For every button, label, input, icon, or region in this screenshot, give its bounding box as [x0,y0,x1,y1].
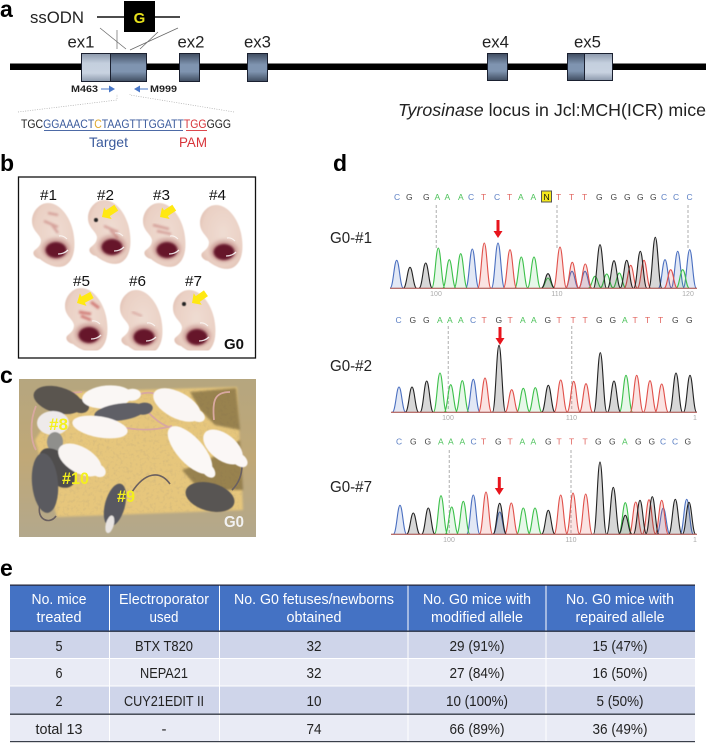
table row: BTX T820: 15 (47%) [592,638,648,655]
table row: CUY21EDIT II [56,693,644,710]
base calls: A [622,436,628,446]
table row: total [36,721,648,738]
table header text: treated [36,609,82,626]
base calls: C [660,436,666,446]
PAM label: PAM [179,134,207,150]
fetus #6 [120,290,162,354]
base calls: C [470,315,476,325]
base calls: G [609,436,616,446]
base calls: C [686,192,693,202]
mouse labels [49,416,135,506]
panel label c: c [0,362,13,388]
base calls: G [423,192,430,202]
traces [390,237,697,288]
table row: NEPA21 [56,665,648,682]
base calls: A [622,315,628,325]
table grid lines [10,584,695,742]
base calls: G [635,436,642,446]
table row: NEPA21: 6 [56,665,62,682]
exon 3 [248,54,268,82]
base calls: T [556,436,562,446]
position ticks: 110 [565,537,577,544]
fetus labels: #4 [209,187,226,204]
table row: NEPA21: 27 (84%) [450,665,504,682]
exon 5 [568,54,612,80]
table row: total: 74 [306,721,322,738]
primers M463 and M999 [71,84,177,94]
panel a: tyrosinase locus diagram [0,0,706,150]
base calls: C [470,436,477,446]
panel e: results table [0,555,695,742]
table row: CUY21EDIT II: 2 [56,693,62,710]
position ticks: 100 [442,415,454,422]
ssODN donor with G base: G [134,10,145,27]
base calls: A [531,315,537,325]
table row: BTX T820: 32 [306,638,322,655]
base calls: A [530,436,536,446]
N highlight [542,191,552,202]
table row: CUY21EDIT II: 10 [306,693,322,710]
exon 2 [180,54,200,82]
base calls: G [495,436,502,446]
base calls: G [610,192,617,202]
table row: CUY21EDIT II: CUY21EDIT II [124,693,204,710]
table row: CUY21EDIT II: 10 (100%) [446,693,508,710]
position ticks: 110 [551,291,563,298]
base calls: N [544,192,550,202]
fetus labels: #7 [185,273,202,290]
mouse labels: #9 [117,488,135,506]
table header text: modified allele [431,609,523,626]
traces [391,345,697,412]
base calls: T [481,192,486,202]
exon labels: ex4 [482,32,509,52]
mouse labels: #8 [49,416,68,434]
base calls: G [624,192,631,202]
panel label b: b [0,150,14,176]
exon labels: ex5 [574,32,601,52]
locus caption: Tyrosinase locus in Jcl:MCH(ICR) mice [398,100,706,120]
exon labels: ex3 [244,32,271,52]
mice [29,381,255,536]
exon labels: ex1 [68,32,94,52]
base calls: C [396,436,402,446]
base calls: A [444,192,450,202]
homology guide lines [100,28,178,50]
table header text: No. G0 fetuses/newborns [234,591,394,608]
base calls: A [458,315,464,325]
base calls: C [672,436,678,446]
base calls: T [556,315,562,325]
red arrow [494,220,502,238]
fetus #1 [32,203,74,267]
base calls: G [596,315,603,325]
position ticks: 100 [430,291,442,298]
exon labels: ex2 [178,32,204,52]
base calls: A [437,315,443,325]
fetus #5 [65,288,107,352]
table header text: repaired allele [576,609,664,626]
dark bedding patches [182,388,243,490]
fetus #4 [200,205,242,269]
panel label d: d [333,150,347,176]
chromatogram G0-#1 [330,191,697,298]
base calls: G [545,436,552,446]
base calls: T [582,315,588,325]
table header text [32,591,674,626]
base calls: A [518,192,524,202]
base calls: A [460,436,466,446]
table header background [10,585,695,631]
base calls: T [569,436,574,446]
base calls: T [508,436,513,446]
base calls: A [520,315,526,325]
base calls: T [632,315,638,325]
cage photo [19,379,256,537]
base calls: G [424,436,431,446]
panel c: G0 mice photo [0,362,256,537]
fetus labels: #1 [40,187,57,204]
table rows background [10,631,695,741]
fetus labels [40,187,226,290]
position ticks: 100 [443,537,455,544]
fetus #2 [88,200,130,264]
exon 4 [488,54,508,80]
table row: NEPA21: 32 [306,665,322,682]
position ticks [443,537,697,544]
sample label G0-#1: G0-#1 [330,230,372,247]
G0 tag: G0 [224,336,244,353]
position ticks: 1 [693,415,697,422]
table row: NEPA21: NEPA21 [140,665,188,682]
base calls: A [458,192,464,202]
mouse tails [32,392,230,450]
base calls: G [686,315,693,325]
table row: CUY21EDIT II: 5 (50%) [596,693,644,710]
position ticks [442,415,697,422]
target and PAM underlines [44,129,207,132]
red arrow [496,327,504,345]
base calls: A [530,192,536,202]
Target label: Target [89,134,128,150]
base calls: A [448,436,454,446]
base calls: G [595,436,602,446]
table row: NEPA21: 16 (50%) [592,665,648,682]
base calls: G [684,436,691,446]
base calls: G [596,192,603,202]
base calls: G [648,436,655,446]
position ticks: 110 [566,415,577,422]
position ticks: 120 [682,291,694,298]
wood chip bedding [35,387,243,517]
G0 tag: G0 [224,514,244,531]
base calls: A [434,192,440,202]
base calls: G [406,192,413,202]
base calls: G [610,315,616,325]
base calls: A [520,436,526,446]
fetus labels: #3 [153,187,170,204]
base calls: T [569,192,574,202]
gridlines [449,450,571,533]
base calls: A [447,315,453,325]
chromatogram G0-#2 [330,315,697,422]
chromatogram G0-#7 [330,436,697,544]
base calls: G [410,315,416,325]
gridlines [448,326,572,411]
target sequence: TGCGGAAACTCTAAGTTTGGATTTGGGGG [21,117,231,131]
base calls: T [482,315,487,325]
sample label G0-#2: G0-#2 [330,358,372,375]
panel d: sequencing chromatograms [330,150,697,544]
genomic locus line [10,64,706,70]
mouse labels: #10 [62,470,89,488]
zoom dotted lines [18,94,234,112]
base calls: C [673,192,679,202]
ssODN donor with G base [97,1,180,32]
base calls: T [658,315,663,325]
table header text: obtained [286,609,342,626]
gridlines [436,205,688,250]
table row: BTX T820 [56,638,648,655]
position ticks [430,291,694,298]
base calls: G [637,192,644,202]
table row: total: - [162,721,166,738]
fetus labels: #5 [73,273,90,290]
sample label G0-#7: G0-#7 [330,479,372,496]
base calls: G [672,315,679,325]
base calls: T [508,315,513,325]
base calls: T [582,192,587,202]
base calls: C [494,192,500,202]
fetus labels: #2 [97,187,114,204]
base calls: T [645,315,650,325]
position ticks: 1 [693,537,697,544]
table header text: No. G0 mice with [423,591,531,608]
base calls: G [650,192,657,202]
yellow arrows marking eye pigmentation [74,202,210,309]
table header text: No. mice [32,591,86,608]
table row: BTX T820: 29 (91%) [450,638,504,655]
base calls: C [394,192,400,202]
exon labels [68,32,601,52]
table header text: Electroporator [119,591,209,608]
base calls: G [410,436,417,446]
panel b: G0 fetuses photo [0,150,256,358]
red arrow [495,477,504,495]
base calls: T [507,192,512,202]
base calls: C [396,315,402,325]
base calls: C [661,192,667,202]
white mask below the fetuses [60,350,250,357]
base calls: A [438,436,444,446]
table row: total: 66 (89%) [450,721,504,738]
primers M463 and M999: M999 [150,84,177,94]
base calls: T [582,436,588,446]
ssODN label: ssODN [30,8,84,27]
table row: BTX T820: BTX T820 [135,638,193,655]
base calls: T [570,315,576,325]
base calls: T [481,436,486,446]
base calls: T [556,192,561,202]
base calls: G [496,315,502,325]
traces [391,462,697,534]
fetus labels: #6 [129,273,146,290]
panel label e: e [0,555,13,581]
table header text: No. G0 mice with [566,591,674,608]
base calls: G [544,315,551,325]
base calls: C [468,192,474,202]
table row: total: 36 (49%) [592,721,648,738]
primers M463 and M999: M463 [71,84,98,94]
photo frame [18,177,256,358]
exon 1 [82,54,146,82]
table row: total: total 13 [36,721,82,738]
base calls: G [423,315,430,325]
fetus #3 [143,203,185,267]
table header text: used [150,609,178,626]
table row: BTX T820: 5 [56,638,62,655]
fetus #7 [173,290,215,354]
